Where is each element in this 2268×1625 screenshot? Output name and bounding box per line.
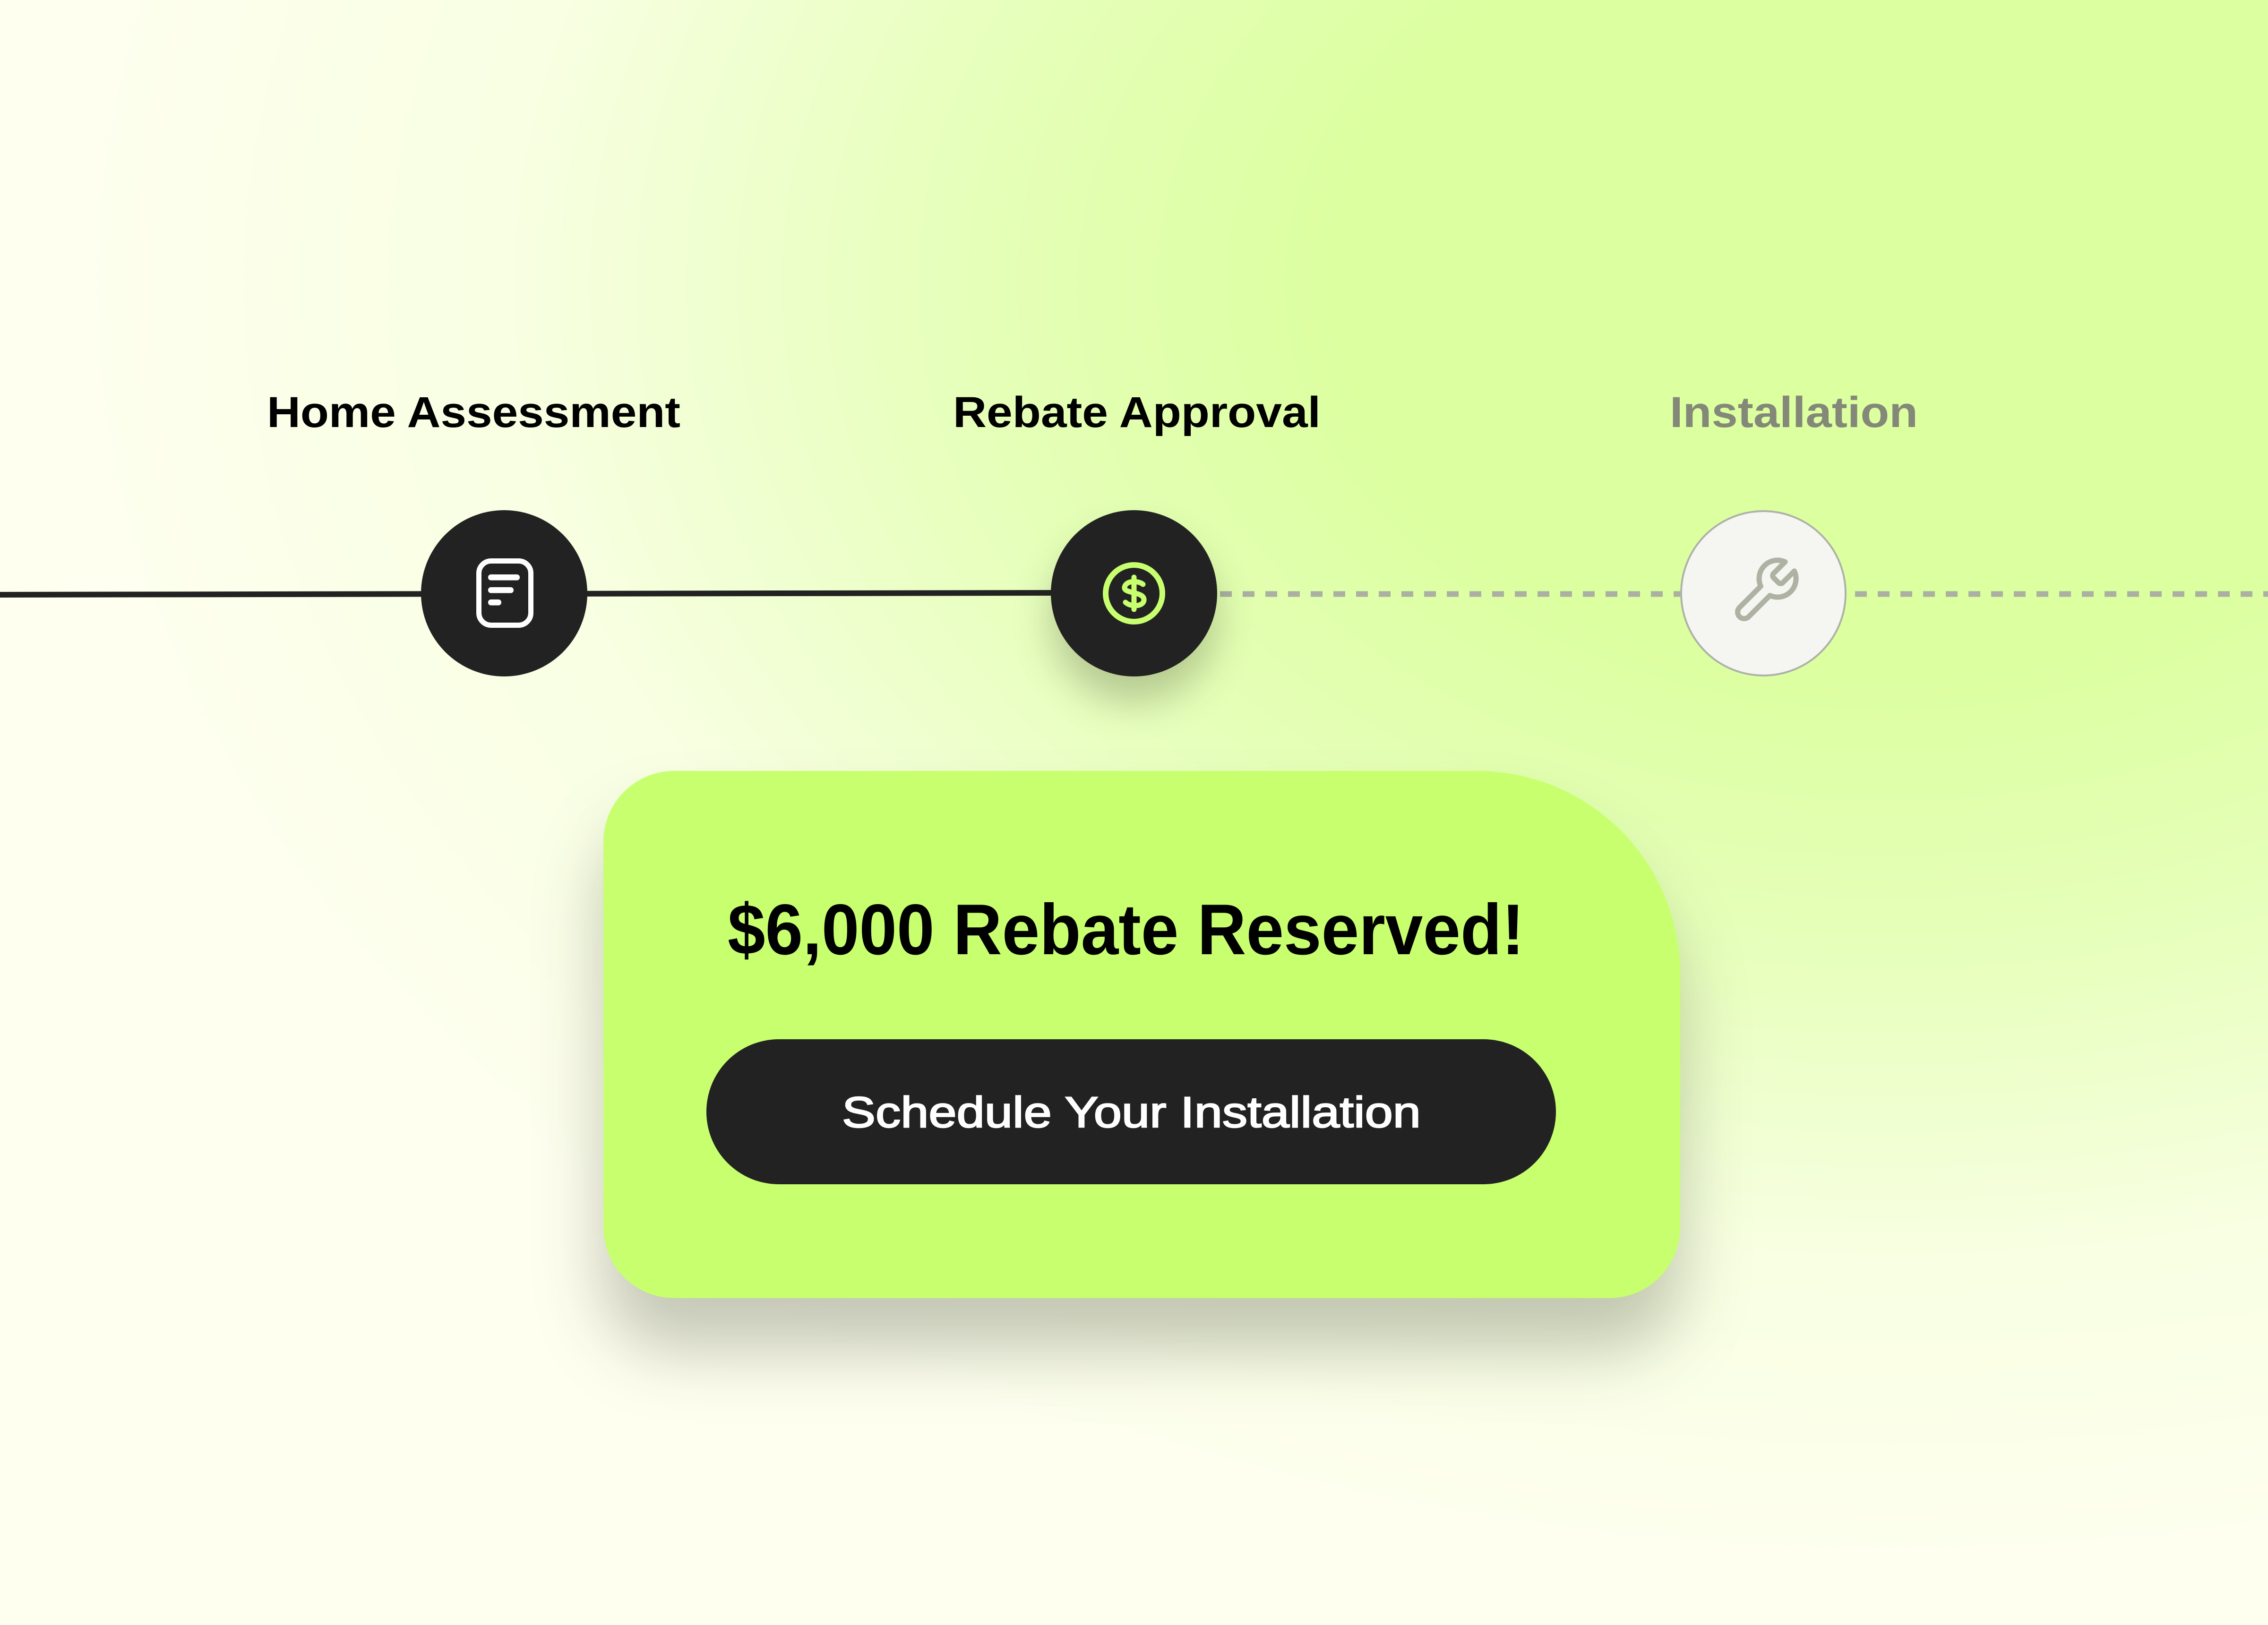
heading: rebate reserved: $6,000 Rebate Reserved! <box>728 889 1524 970</box>
step node: home assessment <box>421 510 587 676</box>
step node: rebate approval <box>1051 510 1217 676</box>
button: schedule installation: Schedule Your Installation <box>842 1088 1421 1137</box>
completed connector line <box>0 593 1058 595</box>
icon: wrench <box>1737 560 1796 619</box>
panel: rebate reserved card <box>603 771 1680 1298</box>
button: schedule installation <box>706 1039 1556 1184</box>
step label: Installation: Installation <box>1670 388 1918 436</box>
step label: Rebate Approval: Rebate Approval <box>953 388 1321 436</box>
step node: installation <box>1681 511 1846 676</box>
step label: Home Assessment: Home Assessment <box>267 388 680 436</box>
pending connector line: right <box>1855 591 2268 597</box>
icon: dollar coin <box>1106 565 1162 622</box>
icon: document <box>479 561 531 625</box>
pending connector line: middle <box>1220 591 1682 597</box>
